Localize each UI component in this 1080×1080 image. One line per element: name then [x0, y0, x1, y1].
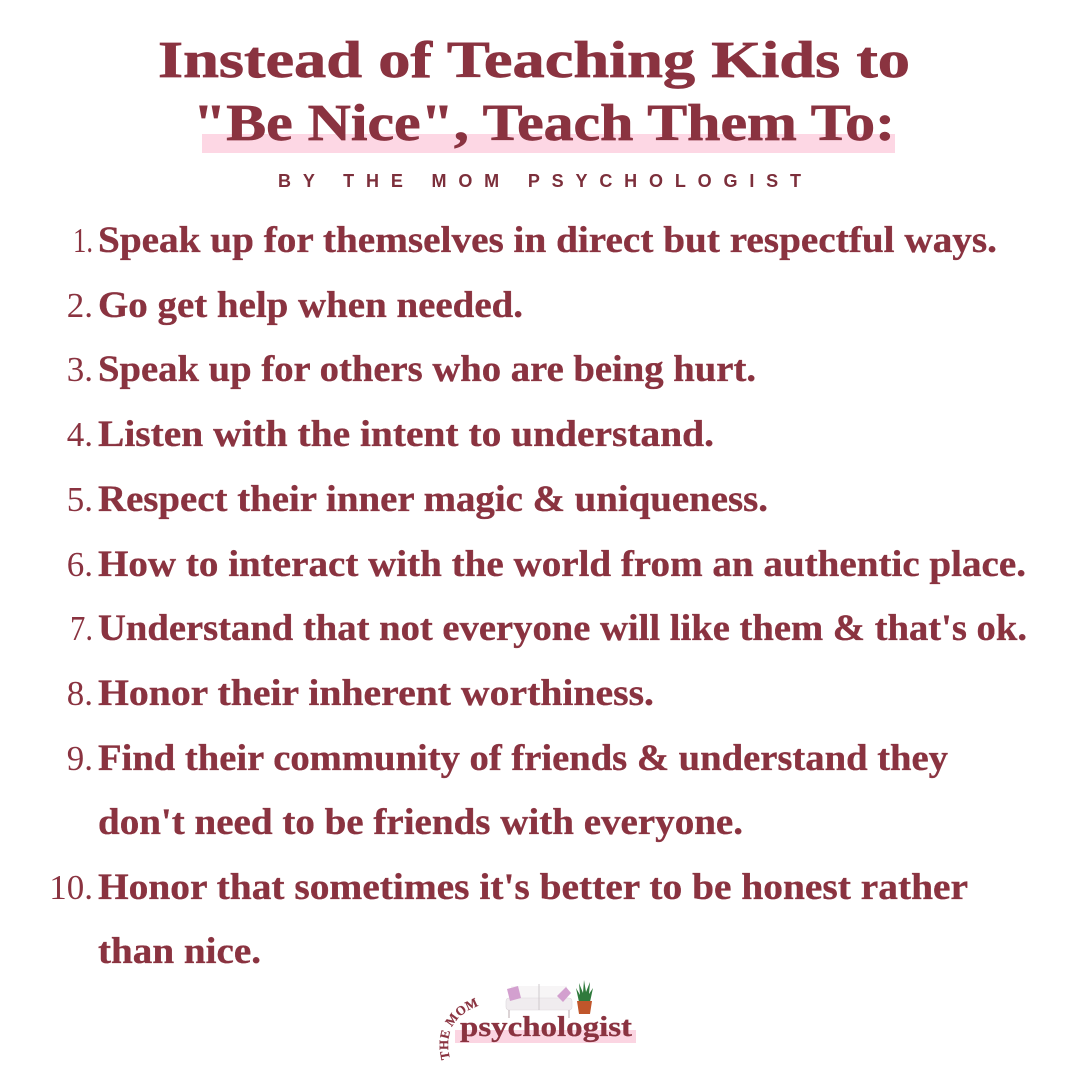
item 1: Speak up for themselves in direct but respectful ways.: [98, 220, 997, 261]
item 2: 2.: [67, 286, 93, 325]
item 10: than nice.: [98, 931, 261, 972]
item 8: Honor their inherent worthiness.: [98, 673, 654, 714]
item 6: How to interact with the world from an authentic place.: [98, 544, 1026, 585]
item 7: Understand that not everyone will like them & that's ok.: [98, 608, 1027, 649]
logo arc text: THE MOM: [440, 998, 478, 1060]
item 1: 1.: [73, 221, 93, 260]
item 10: 10.: [49, 868, 93, 907]
item 9: don't need to be friends with everyone.: [98, 802, 743, 843]
item 4: Listen with the intent to understand.: [98, 414, 714, 455]
title: "Be Nice", Teach Them To:: [193, 95, 895, 152]
item 7: 7.: [70, 609, 93, 648]
item 5: Respect their inner magic & uniqueness.: [98, 479, 768, 520]
item 3: Speak up for others who are being hurt.: [98, 349, 756, 390]
item 10: Honor that sometimes it's better to be honest rather: [98, 867, 968, 908]
item 4: 4.: [67, 415, 93, 454]
numbered list: [49, 220, 1027, 972]
logo wordmark: psychologist: [460, 1012, 633, 1043]
item 3: 3.: [67, 350, 93, 389]
item 2: Go get help when needed.: [98, 285, 523, 326]
item 9: Find their community of friends & understand they: [98, 738, 949, 779]
item 8: 8.: [67, 674, 93, 713]
icon: potted plant: [576, 980, 593, 1014]
icon: sofa: [506, 984, 572, 1018]
item 9: [67, 738, 949, 843]
item 5: 5.: [67, 480, 93, 519]
item 10: [49, 867, 968, 972]
logo highlight: [455, 1030, 636, 1043]
title: [158, 32, 910, 153]
item 9: 9.: [67, 739, 93, 778]
logo: [440, 980, 636, 1060]
item 6: 6.: [67, 545, 93, 584]
title: Instead of Teaching Kids to: [158, 32, 910, 89]
subtitle: BY THE MOM PSYCHOLOGIST: [278, 171, 801, 191]
